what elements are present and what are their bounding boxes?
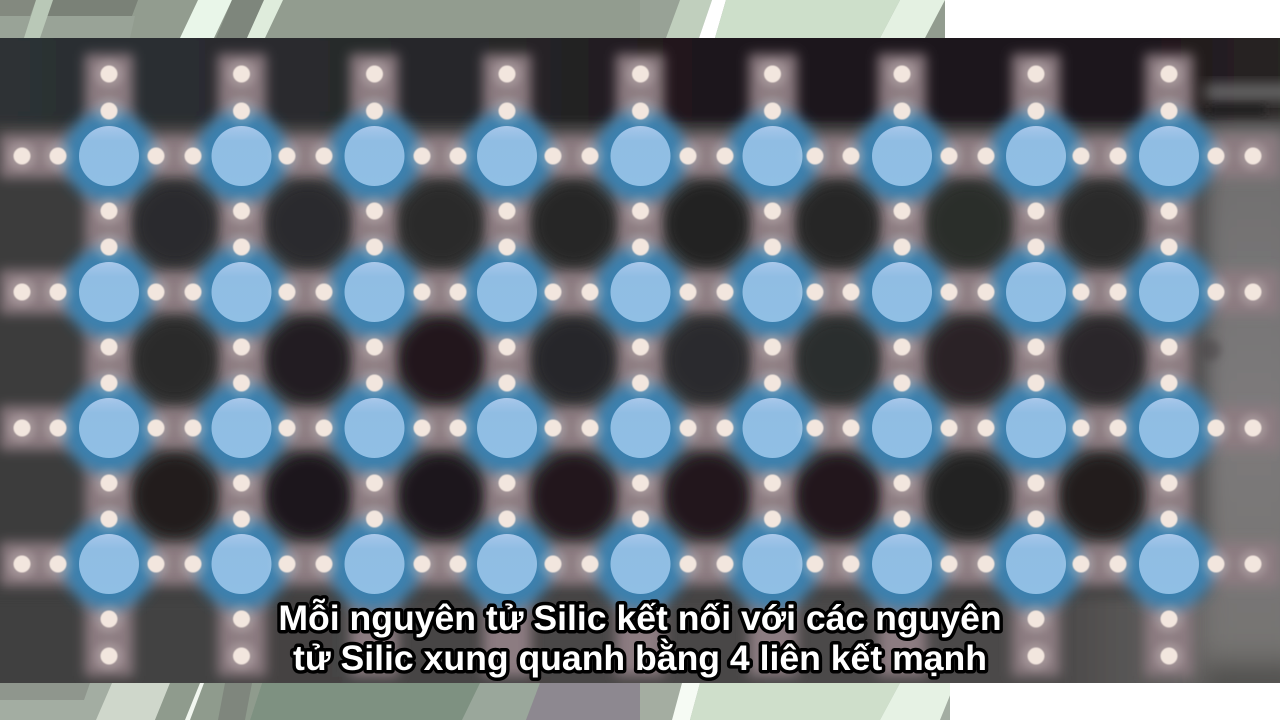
top decorative banner bbox=[0, 0, 1280, 38]
subtitle caption: Mỗi nguyên tử Silic kết nối với các nguyên bbox=[278, 598, 1002, 638]
silicon atoms row 2 bbox=[63, 246, 1215, 338]
vertical bond electrons bbox=[95, 60, 1183, 670]
subtitle caption bbox=[278, 598, 1002, 678]
dark gaps between atoms bbox=[135, 184, 1142, 536]
silicon atoms row 4 bbox=[63, 518, 1215, 610]
right edge grey haze bbox=[1199, 84, 1280, 694]
subtitle caption: tử Silic xung quanh bằng 4 liên kết mạnh bbox=[293, 638, 987, 678]
silicon atoms row 3 bbox=[63, 382, 1215, 474]
silicon atoms row 1 bbox=[63, 110, 1215, 202]
horizontal bond electrons bbox=[8, 142, 1267, 578]
bottom decorative banner bbox=[0, 683, 1280, 720]
